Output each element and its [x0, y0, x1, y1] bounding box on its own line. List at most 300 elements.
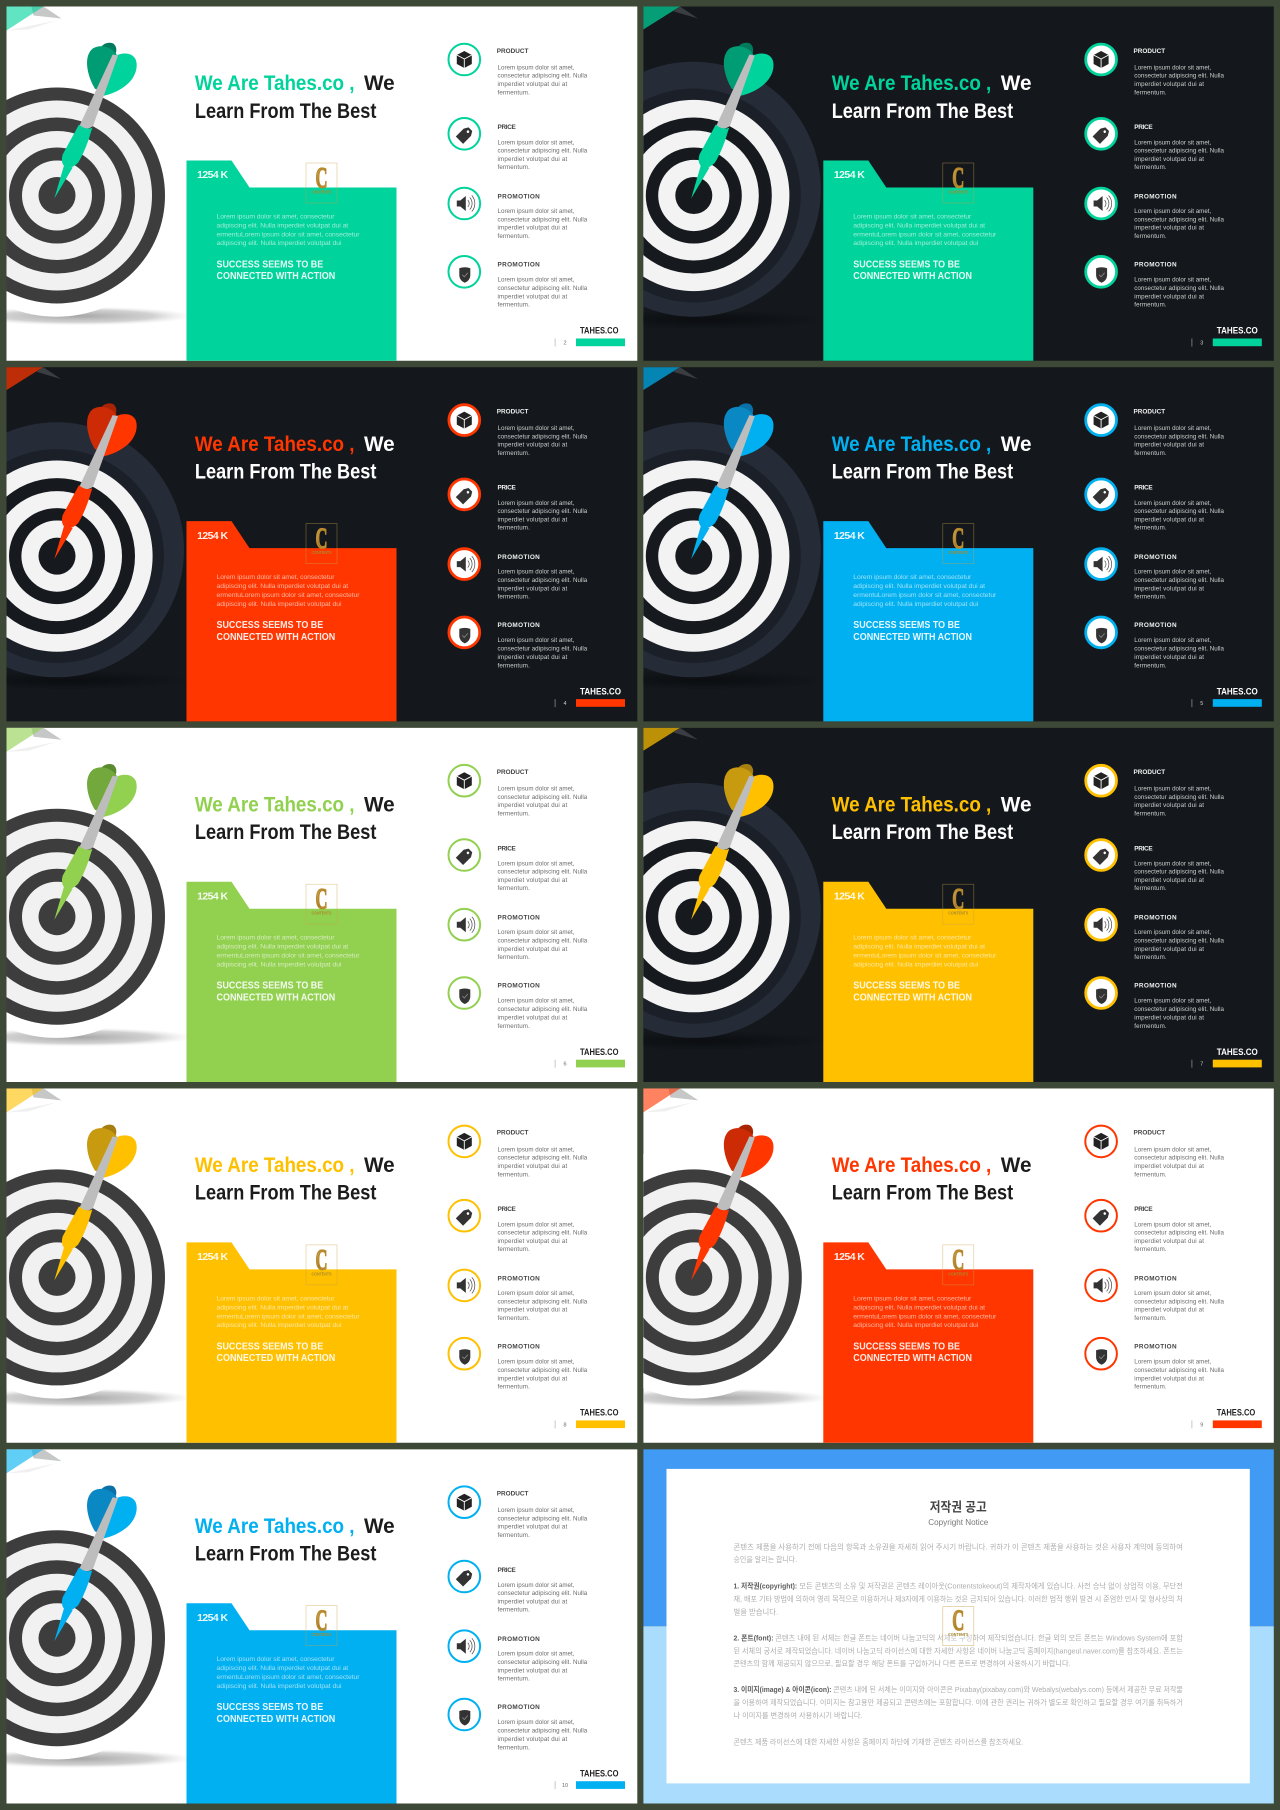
clause 3: image and icon: 3. 이미지(image) & 아이콘(icon):: [733, 1684, 831, 1694]
footer: TAHES.CO: [580, 326, 618, 337]
folder panel: [823, 160, 1033, 362]
item: price: imperdiet volutpat dui at: [498, 1238, 567, 1245]
folder panel: CONNECTED WITH ACTION: [216, 1352, 335, 1364]
folder panel: [186, 521, 396, 722]
item: product: PRODUCT: [1134, 769, 1165, 776]
item: price: imperdiet volutpat dui at: [1134, 517, 1204, 524]
corner ribbon: [6, 6, 62, 30]
item: promotion shield: fermentum.: [1134, 302, 1167, 309]
clause 3: image and icon: 콘텐츠 내에 된 서체는 이미지와 아이콘은 Pixabay(pixabay.com)와 Webalys(webalys.com) 등에서 제공한 무료 저작물: [833, 1684, 1183, 1694]
item: promotion shield: consectetur adipiscing elit. Nulla: [498, 1367, 588, 1374]
item: product: Lorem ipsum dolor sit amet,: [1134, 786, 1212, 793]
folder panel: ermentuLorem ipsum dolor sit amet, consectetur: [216, 953, 360, 960]
title: Learn From The Best: [195, 99, 376, 123]
item: price: fermentum.: [498, 1246, 530, 1253]
title: We: [364, 1514, 395, 1538]
item: promotion speaker: PROMOTION: [498, 1275, 540, 1282]
item: price: imperdiet volutpat dui at: [498, 1599, 567, 1606]
clause 2: font: [734, 1632, 1183, 1668]
dart: [54, 43, 137, 198]
item: promotion speaker: Lorem ipsum dolor sit amet,: [498, 929, 575, 936]
item: price: PRICE: [498, 124, 517, 131]
item: price: [1086, 840, 1225, 892]
item: product: imperdiet volutpat dui at: [498, 1524, 567, 1531]
title: We: [1001, 71, 1032, 95]
dartboard: [566, 1144, 831, 1407]
watermark logo: CONTENTS: [312, 1632, 332, 1637]
closing line: 콘텐츠 제품 라이선스에 대한 자세한 사항은 홈페이지 하단에 기재한 콘텐츠 라이선스를 참조하세요.: [733, 1736, 1023, 1746]
item: product: PRODUCT: [497, 1490, 528, 1497]
item: product: imperdiet volutpat dui at: [1134, 802, 1204, 809]
folder panel: adipiscing elit. Nulla imperdiet volutpat dui: [216, 1322, 342, 1329]
item: promotion speaker: [448, 909, 588, 961]
item: promotion speaker: Lorem ipsum dolor sit amet,: [1134, 929, 1212, 936]
clause 1: copyright: 재, 배포 기타 방법에 의하여 영리 목적으로 이용하거나 제3자에게 이용하는 것은 금지되어 있습니다. 이러한 법적 행위 발견 시 준엄한 민사 및 형사상의 처: [733, 1593, 1183, 1603]
item: product: PRODUCT: [497, 769, 528, 776]
item: product: fermentum.: [498, 1532, 530, 1539]
corner ribbon: [643, 6, 698, 30]
item: promotion shield: fermentum.: [1134, 1023, 1167, 1030]
watermark logo: [306, 522, 337, 564]
folder panel: 1254 K: [197, 530, 229, 542]
title: [195, 1514, 395, 1566]
folder panel: ermentuLorem ipsum dolor sit amet, consectetur: [853, 953, 997, 960]
item: price: fermentum.: [1134, 885, 1167, 892]
title: We: [1001, 792, 1032, 816]
item: promotion speaker: consectetur adipiscing elit. Nulla: [1134, 577, 1225, 584]
folder panel: adipiscing elit. Nulla imperdiet volutpat dui at: [853, 1304, 985, 1311]
item: promotion speaker: imperdiet volutpat dui at: [498, 946, 567, 953]
watermark logo: CONTENTS: [312, 1271, 332, 1276]
corner ribbon: [6, 1088, 62, 1112]
folder panel: SUCCESS SEEMS TO BE: [853, 980, 960, 992]
item: promotion shield: fermentum.: [498, 1384, 530, 1391]
item: promotion speaker: fermentum.: [498, 954, 530, 961]
item: promotion shield: [1086, 978, 1225, 1030]
item: promotion speaker: Lorem ipsum dolor sit amet,: [498, 569, 575, 576]
item: product: fermentum.: [498, 811, 530, 818]
footer: TAHES.CO: [1217, 686, 1258, 697]
folder panel: CONNECTED WITH ACTION: [216, 991, 335, 1003]
folder panel: 1254 K: [834, 530, 865, 542]
folder panel: [186, 882, 396, 1083]
dart: [691, 1125, 773, 1280]
copyright heading: Copyright Notice: [928, 1517, 989, 1527]
item: promotion speaker: [448, 1630, 588, 1683]
folder panel: Lorem ipsum dolor sit amet, consectetur: [216, 214, 335, 220]
item: price: [448, 1561, 588, 1614]
watermark logo: [943, 1604, 974, 1646]
item: price: consectetur adipiscing elit. Nulla: [498, 148, 588, 154]
dartboard: [0, 1144, 194, 1407]
watermark logo: CONTENTS: [312, 190, 332, 194]
item: price: Lorem ipsum dolor sit amet,: [498, 140, 575, 146]
footer: TAHES.CO: [1217, 1408, 1255, 1419]
item: promotion shield: fermentum.: [1134, 1384, 1167, 1391]
clause 2: font: 된 서체의 궁서로 제작되었습니다. 네이버 나눔고딕 라이선스에 대한 자세한 사항은 네이버 나눔고딕 홈페이지(hangeul.naver.com)를 참조하세요. 폰트는: [733, 1645, 1183, 1655]
folder panel: CONNECTED WITH ACTION: [216, 270, 335, 282]
item: product: imperdiet volutpat dui at: [498, 1163, 567, 1170]
item: price: Lorem ipsum dolor sit amet,: [1134, 500, 1212, 507]
title: We: [1001, 1153, 1032, 1177]
folder panel: CONNECTED WITH ACTION: [853, 270, 972, 282]
item: promotion speaker: PROMOTION: [498, 554, 540, 561]
folder panel: 1254 K: [197, 169, 229, 181]
title: [832, 432, 1032, 483]
item: product: [449, 405, 588, 457]
corner ribbon: [643, 1088, 698, 1112]
footer: TAHES.CO: [1217, 1047, 1258, 1058]
item: product: [448, 1486, 588, 1539]
item: product: PRODUCT: [497, 48, 528, 55]
folder panel: 1254 K: [197, 1251, 229, 1263]
watermark logo: [306, 883, 337, 924]
item: price: PRICE: [498, 1567, 517, 1574]
folder panel: adipiscing elit. Nulla imperdiet volutpat dui at: [216, 583, 348, 590]
item: product: Lorem ipsum dolor sit amet,: [498, 1507, 575, 1514]
dart: [54, 1485, 137, 1641]
title: We: [1001, 432, 1032, 456]
footer: [1192, 1047, 1262, 1068]
item: product: Lorem ipsum dolor sit amet,: [498, 64, 575, 72]
item: promotion speaker: imperdiet volutpat dui at: [498, 225, 567, 232]
item: promotion shield: imperdiet volutpat dui at: [498, 1015, 567, 1022]
item: promotion speaker: fermentum.: [1134, 594, 1167, 601]
item: promotion shield: [1085, 1338, 1225, 1391]
item: price: fermentum.: [498, 525, 530, 532]
item: price: [1085, 1200, 1225, 1253]
folder panel: adipiscing elit. Nulla imperdiet volutpat dui at: [853, 583, 985, 590]
item: promotion shield: imperdiet volutpat dui at: [498, 654, 567, 661]
footer: 7: [1200, 1062, 1203, 1068]
item: promotion shield: imperdiet volutpat dui at: [498, 1736, 567, 1743]
item: promotion shield: fermentum.: [1134, 662, 1167, 669]
item: product: Lorem ipsum dolor sit amet,: [498, 1146, 575, 1153]
item: promotion shield: fermentum.: [498, 1023, 530, 1030]
item: promotion shield: imperdiet volutpat dui at: [1134, 654, 1204, 661]
corner ribbon: [6, 1449, 62, 1473]
item: promotion speaker: imperdiet volutpat dui at: [1134, 585, 1204, 592]
item: promotion shield: [1086, 617, 1225, 669]
item: promotion speaker: PROMOTION: [1134, 194, 1177, 200]
title: We Are Tahes.co ,: [832, 432, 991, 456]
folder panel: SUCCESS SEEMS TO BE: [216, 1701, 323, 1713]
panel: slide 9, red on white: [643, 1088, 1274, 1443]
dartboard: [0, 62, 194, 325]
corner ribbon: [643, 367, 698, 390]
item: promotion shield: PROMOTION: [498, 1343, 540, 1350]
item: promotion shield: [448, 1699, 588, 1751]
item: price: imperdiet volutpat dui at: [498, 877, 567, 884]
item: promotion shield: PROMOTION: [1134, 262, 1177, 268]
dart: [691, 43, 773, 198]
clause 2: font: 콘텐츠의 함께 제공되지 않으므로, 필요할 경우 해당 폰트를 구입하거나 다른 폰트로 변경하여 사용하시기 바랍니다.: [733, 1658, 1070, 1668]
watermark logo: [306, 162, 337, 203]
footer: 2: [564, 340, 567, 346]
folder panel: Lorem ipsum dolor sit amet, consectetur: [853, 574, 972, 581]
folder panel: Lorem ipsum dolor sit amet, consectetur: [216, 1295, 335, 1302]
watermark logo: [943, 162, 974, 203]
item: promotion shield: PROMOTION: [1134, 983, 1177, 990]
footer: 5: [1200, 701, 1203, 707]
item: promotion shield: consectetur adipiscing elit. Nulla: [498, 1728, 588, 1735]
item: promotion speaker: consectetur adipiscing elit. Nulla: [498, 1298, 588, 1305]
title: [195, 432, 395, 483]
watermark logo: C: [316, 1604, 328, 1637]
item: price: imperdiet volutpat dui at: [498, 156, 567, 163]
panel: slide 5, blue on dark: [643, 367, 1274, 722]
item: promotion shield: [449, 617, 588, 669]
item: promotion speaker: Lorem ipsum dolor sit amet,: [498, 1651, 575, 1658]
title: Learn From The Best: [195, 459, 376, 483]
item: price: fermentum.: [1134, 525, 1167, 532]
item: promotion speaker: [1086, 188, 1225, 240]
item: price: [1086, 118, 1225, 171]
panel: slide 6, lime on white: [6, 728, 638, 1082]
footer: [555, 686, 625, 707]
item: price: [449, 479, 588, 532]
item: price: PRICE: [498, 485, 517, 492]
title: Learn From The Best: [832, 459, 1013, 483]
footer: [555, 1768, 625, 1789]
footer: [555, 1408, 625, 1428]
title: [195, 71, 395, 123]
folder panel: ermentuLorem ipsum dolor sit amet, consectetur: [216, 1674, 360, 1681]
folder panel: [186, 1603, 396, 1804]
item: promotion shield: Lorem ipsum dolor sit amet,: [498, 276, 575, 284]
item: promotion speaker: fermentum.: [1134, 1315, 1167, 1322]
item: product: imperdiet volutpat dui at: [498, 802, 567, 809]
clause 3: image and icon: 나 이미지를 변경하여 사용하시기 바랍니다.: [733, 1710, 862, 1720]
item: price: consectetur adipiscing elit. Nulla: [498, 508, 588, 515]
footer: TAHES.CO: [580, 1408, 618, 1419]
title: We: [364, 792, 395, 816]
watermark logo: C: [316, 883, 328, 916]
folder panel: SUCCESS SEEMS TO BE: [853, 619, 960, 631]
copyright heading: [928, 1500, 989, 1527]
folder panel: [823, 1242, 1033, 1443]
title: Learn From The Best: [832, 99, 1013, 123]
watermark logo: C: [952, 522, 964, 555]
item: product: fermentum.: [1134, 450, 1167, 457]
folder panel: Lorem ipsum dolor sit amet, consectetur: [853, 935, 972, 942]
watermark logo: CONTENTS: [948, 1271, 968, 1276]
watermark logo: CONTENTS: [948, 550, 968, 555]
item: price: consectetur adipiscing elit. Nulla: [498, 1590, 588, 1597]
folder panel: 1254 K: [834, 890, 865, 902]
copyright heading: 저작권 공고: [930, 1500, 987, 1515]
watermark logo: CONTENTS: [948, 911, 968, 916]
folder panel: adipiscing elit. Nulla imperdiet volutpat dui: [853, 601, 979, 608]
item: product: consectetur adipiscing elit. Nulla: [498, 1155, 588, 1162]
item: product: PRODUCT: [497, 1130, 528, 1137]
folder panel: ermentuLorem ipsum dolor sit amet, consectetur: [853, 592, 997, 599]
folder panel: CONNECTED WITH ACTION: [853, 1352, 972, 1364]
item: promotion shield: PROMOTION: [498, 262, 540, 268]
folder panel: SUCCESS SEEMS TO BE: [853, 1340, 960, 1352]
item: promotion speaker: consectetur adipiscing elit. Nulla: [1134, 1298, 1225, 1305]
title: Learn From The Best: [195, 1541, 376, 1565]
item: price: fermentum.: [1134, 164, 1167, 171]
watermark logo: C: [952, 1604, 964, 1637]
item: promotion shield: PROMOTION: [498, 1704, 540, 1711]
panel: slide 2, green on white: [6, 6, 638, 361]
folder panel: adipiscing elit. Nulla imperdiet volutpat dui at: [216, 944, 348, 951]
item: price: consectetur adipiscing elit. Nulla: [498, 869, 588, 876]
footer: [555, 326, 625, 346]
item: promotion shield: fermentum.: [498, 302, 530, 309]
item: price: [1086, 479, 1225, 532]
item: promotion shield: consectetur adipiscing elit. Nulla: [498, 285, 588, 292]
title: Learn From The Best: [832, 1181, 1013, 1205]
folder panel: adipiscing elit. Nulla imperdiet volutpat dui at: [853, 944, 985, 951]
item: product: [448, 1126, 588, 1178]
watermark logo: CONTENTS: [948, 190, 968, 194]
item: product: Lorem ipsum dolor sit amet,: [1134, 425, 1212, 432]
panel: slide 3, green on dark: [643, 6, 1274, 361]
watermark logo: C: [952, 162, 964, 194]
item: price: Lorem ipsum dolor sit amet,: [498, 1582, 575, 1589]
footer: 4: [564, 701, 567, 707]
folder panel: CONNECTED WITH ACTION: [853, 991, 972, 1003]
item: promotion speaker: PROMOTION: [498, 915, 540, 922]
title: We Are Tahes.co ,: [195, 71, 354, 95]
folder panel: SUCCESS SEEMS TO BE: [216, 1340, 323, 1352]
clause 1: copyright: 모든 콘텐츠의 소유 및 저작권은 콘텐츠 레이아웃(Contentstokeout)의 제작자에게 있습니다. 사전 승낙 없이 상업적 이용, 무단전: [799, 1580, 1183, 1590]
watermark logo: [943, 1243, 974, 1285]
folder panel: Lorem ipsum dolor sit amet, consectetur: [853, 1295, 972, 1302]
item: price: PRICE: [1134, 124, 1153, 131]
dart: [54, 403, 137, 559]
item: price: fermentum.: [498, 885, 530, 892]
title: [195, 792, 395, 844]
item: product: consectetur adipiscing elit. Nulla: [498, 73, 588, 80]
item: promotion shield: imperdiet volutpat dui at: [1134, 294, 1204, 300]
title: We Are Tahes.co ,: [195, 792, 354, 816]
item: price: PRICE: [1134, 485, 1153, 492]
item: product: consectetur adipiscing elit. Nulla: [498, 1515, 588, 1522]
clause 1: copyright: [734, 1580, 1183, 1616]
folder panel: ermentuLorem ipsum dolor sit amet, consectetur: [853, 1313, 997, 1320]
watermark logo: [306, 1604, 337, 1646]
footer: [1192, 686, 1262, 707]
folder panel: ermentuLorem ipsum dolor sit amet, consectetur: [216, 1313, 360, 1320]
title: We Are Tahes.co ,: [195, 432, 354, 456]
item: product: [1086, 405, 1225, 457]
dartboard: [566, 62, 830, 329]
clause 3: image and icon: [734, 1684, 1183, 1720]
item: promotion shield: imperdiet volutpat dui at: [498, 1375, 567, 1382]
footer: 9: [1200, 1422, 1203, 1428]
item: price: fermentum.: [1134, 1246, 1167, 1253]
panel: copyright notice slide: [643, 1449, 1274, 1804]
panel: slide 4, red on dark: [6, 367, 638, 722]
item: product: imperdiet volutpat dui at: [498, 81, 567, 88]
item: product: fermentum.: [498, 1171, 530, 1178]
item: product: fermentum.: [1134, 811, 1167, 818]
item: promotion speaker: consectetur adipiscing elit. Nulla: [1134, 938, 1225, 945]
item: product: fermentum.: [1134, 90, 1167, 96]
title: [195, 1153, 395, 1205]
folder panel: adipiscing elit. Nulla imperdiet volutpat dui at: [216, 222, 348, 230]
folder panel: [186, 1242, 396, 1443]
item: promotion shield: Lorem ipsum dolor sit amet,: [498, 1358, 575, 1365]
item: promotion shield: [448, 1338, 588, 1391]
item: promotion speaker: fermentum.: [1134, 233, 1167, 240]
item: promotion shield: consectetur adipiscing elit. Nulla: [498, 646, 588, 653]
corner ribbon: [643, 728, 698, 751]
item: price: consectetur adipiscing elit. Nulla: [1134, 869, 1225, 876]
item: promotion speaker: consectetur adipiscing elit. Nulla: [498, 938, 588, 945]
folder panel: ermentuLorem ipsum dolor sit amet, consectetur: [216, 232, 360, 238]
folder panel: SUCCESS SEEMS TO BE: [216, 980, 323, 992]
item: promotion shield: consectetur adipiscing elit. Nulla: [498, 1006, 588, 1013]
item: product: Lorem ipsum dolor sit amet,: [498, 786, 575, 793]
title: [832, 71, 1032, 123]
item: promotion speaker: PROMOTION: [1134, 915, 1177, 922]
item: promotion speaker: imperdiet volutpat dui at: [1134, 1307, 1204, 1314]
item: price: consectetur adipiscing elit. Nulla: [1134, 508, 1225, 515]
corner ribbon: [6, 728, 62, 752]
item: promotion speaker: Lorem ipsum dolor sit amet,: [1134, 208, 1212, 215]
folder panel: CONNECTED WITH ACTION: [216, 1713, 335, 1725]
title: We Are Tahes.co ,: [195, 1153, 354, 1177]
item: price: Lorem ipsum dolor sit amet,: [498, 861, 575, 868]
footer: [1192, 326, 1262, 346]
footer: TAHES.CO: [580, 1768, 618, 1779]
footer: 10: [562, 1783, 568, 1789]
item: promotion speaker: Lorem ipsum dolor sit amet,: [498, 208, 575, 215]
folder panel: 1254 K: [834, 1251, 865, 1263]
watermark logo: CONTENTS: [948, 1632, 968, 1637]
item: promotion shield: PROMOTION: [498, 622, 540, 629]
item: price: consectetur adipiscing elit. Nulla: [1134, 1229, 1225, 1236]
folder panel: adipiscing elit. Nulla imperdiet volutpat dui: [853, 240, 979, 247]
item: price: Lorem ipsum dolor sit amet,: [498, 500, 575, 507]
item: price: PRICE: [1134, 845, 1153, 852]
watermark logo: [943, 883, 974, 924]
folder panel: adipiscing elit. Nulla imperdiet volutpat dui: [216, 240, 342, 247]
dart: [691, 764, 773, 920]
item: promotion speaker: [1086, 909, 1225, 961]
dartboard: [0, 783, 194, 1047]
item: promotion shield: consectetur adipiscing elit. Nulla: [1134, 1367, 1225, 1374]
folder panel: CONNECTED WITH ACTION: [216, 631, 335, 643]
folder panel: [186, 160, 396, 362]
item: promotion speaker: Lorem ipsum dolor sit amet,: [498, 1290, 575, 1297]
item: price: imperdiet volutpat dui at: [498, 517, 567, 524]
item: product: consectetur adipiscing elit. Nulla: [498, 433, 588, 440]
item: product: [1086, 765, 1225, 818]
item: promotion shield: Lorem ipsum dolor sit amet,: [1134, 276, 1212, 284]
folder panel: Lorem ipsum dolor sit amet, consectetur: [216, 935, 335, 942]
item: promotion speaker: PROMOTION: [1134, 554, 1177, 561]
item: promotion shield: Lorem ipsum dolor sit amet,: [1134, 998, 1212, 1005]
item: promotion speaker: fermentum.: [498, 1315, 530, 1322]
item: price: imperdiet volutpat dui at: [1134, 156, 1204, 163]
item: product: [448, 765, 588, 818]
title: Learn From The Best: [195, 1181, 376, 1205]
item: product: imperdiet volutpat dui at: [1134, 442, 1204, 449]
item: promotion speaker: PROMOTION: [498, 1636, 540, 1643]
folder panel: [823, 882, 1033, 1083]
folder panel: 1254 K: [834, 169, 865, 181]
dartboard: [566, 422, 830, 690]
panel: slide 8, yellow on white: [6, 1088, 638, 1443]
item: product: fermentum.: [498, 90, 530, 96]
footer: 6: [564, 1062, 567, 1068]
item: price: Lorem ipsum dolor sit amet,: [1134, 861, 1212, 868]
